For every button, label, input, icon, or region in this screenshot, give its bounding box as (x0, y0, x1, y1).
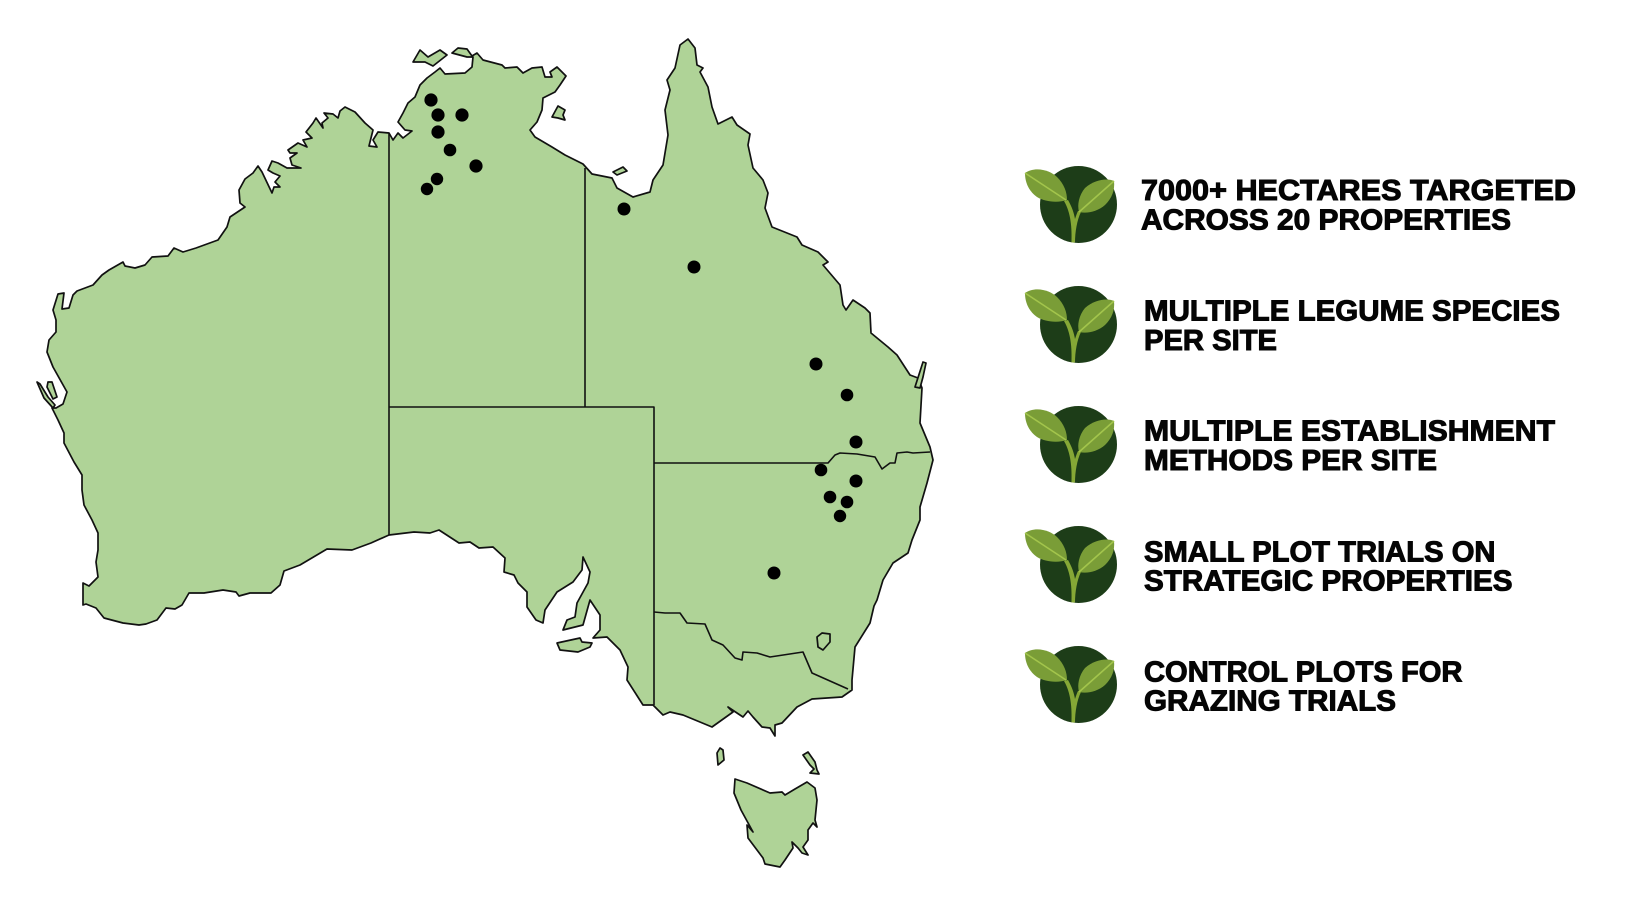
text: STRATEGIC PROPERTIES (1144, 566, 1512, 598)
icon: seedling (1025, 646, 1117, 723)
Tasmania (734, 779, 817, 867)
text: GRAZING TRIALS (1144, 686, 1396, 718)
Tiwi Islands (413, 50, 447, 66)
Dirk Hartog Island (37, 382, 55, 408)
state borders (389, 133, 930, 705)
Kangaroo Island (557, 638, 592, 652)
icon: seedling (1025, 406, 1117, 483)
Mornington Island (613, 167, 627, 175)
list item 4 (1025, 526, 1512, 603)
King Island (717, 748, 724, 765)
site markers (421, 93, 862, 580)
text: PER SITE (1144, 325, 1277, 357)
Australian Capital Territory (817, 633, 830, 650)
Flinders Island (803, 752, 819, 774)
icon: seedling (1025, 286, 1117, 363)
text: ACROSS 20 PROPERTIES (1141, 204, 1511, 236)
Peron Peninsula (47, 382, 57, 399)
Fraser Island (915, 362, 926, 388)
list item 3 (1025, 406, 1555, 483)
text: MULTIPLE ESTABLISHMENT (1144, 416, 1555, 448)
Groote Eylandt (552, 106, 565, 120)
text: METHODS PER SITE (1144, 445, 1437, 477)
list item 1 (1025, 166, 1576, 243)
icon: seedling (1025, 166, 1117, 243)
text: SMALL PLOT TRIALS ON (1144, 537, 1496, 569)
text: MULTIPLE LEGUME SPECIES (1144, 296, 1560, 328)
icon: seedling (1025, 526, 1117, 603)
list item 5 (1025, 646, 1463, 723)
text: CONTROL PLOTS FOR (1144, 657, 1463, 689)
mainland (47, 39, 933, 736)
list item 2 (1025, 286, 1560, 363)
text: 7000+ HECTARES TARGETED (1141, 175, 1576, 207)
map of Australia (37, 39, 933, 867)
